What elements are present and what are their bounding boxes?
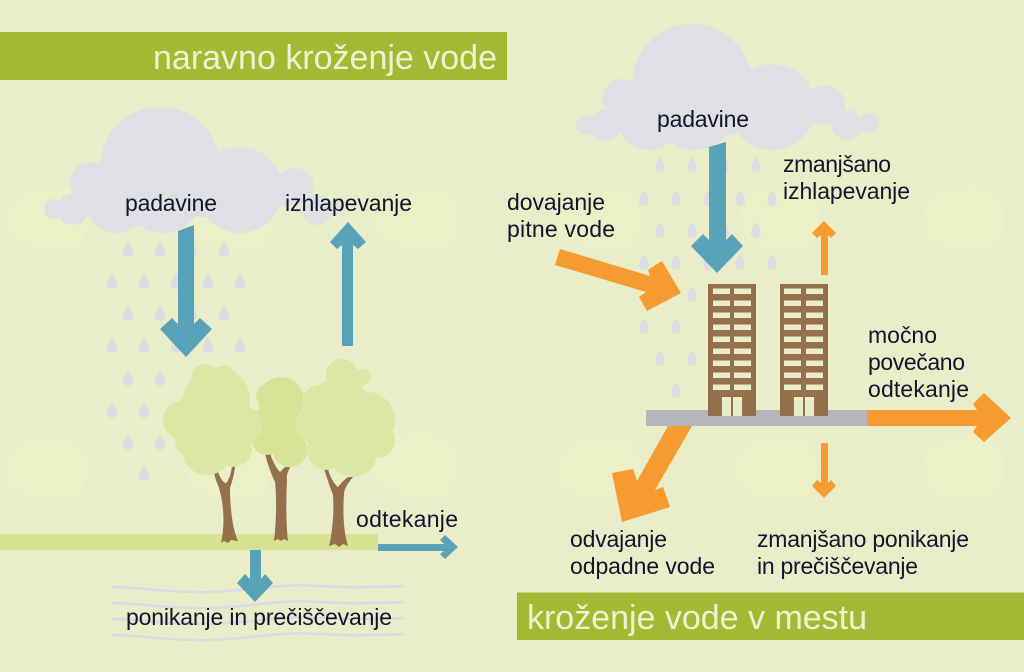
label: zmanjšano izhlapevanje [783,151,910,204]
heading text: natural water cycle: naravno kroženje vode [153,39,497,77]
building 2 [780,284,828,416]
cloud: natural cycle [44,107,343,233]
label: dovajanje pitne vode: pitne vode [507,216,615,242]
label: močno povečano odtekanje: povečano [868,349,965,375]
label: izhlapevanje: izhlapevanje [285,190,412,216]
ground strip [0,534,378,550]
heading text: urban water cycle: kroženje vode v mestu [527,599,867,637]
heading bar: urban water cycle [517,592,1024,640]
label: močno povečano odtekanje: odtekanje [868,376,969,402]
building 1 [708,284,756,416]
raindrops: urban cycle [639,157,777,398]
arrow: infiltration [237,550,273,602]
label: dovajanje pitne vode: dovajanje [507,189,605,215]
label: zmanjšano izhlapevanje: zmanjšano [783,151,891,177]
arrow: reduced infiltration [812,443,836,498]
arrow: drinking water supply [555,249,681,311]
label: odvajanje odpadne vode: odpadne vode [570,553,715,579]
arrow: wastewater discharge [612,426,692,522]
arrow: strongly increased runoff [867,393,1011,442]
label: zmanjšano ponikanje in prečiščevanje: in prečiščevanje [757,553,918,579]
label: močno povečano odtekanje [868,322,969,402]
label: zmanjšano izhlapevanje: izhlapevanje [783,178,910,204]
label: padavine: padavine [657,106,749,132]
label: dovajanje pitne vode [507,189,615,242]
label: zmanjšano ponikanje in prečiščevanje [757,526,969,579]
tree 1 [163,364,262,543]
tree 3 [295,359,395,547]
label: padavine: padavine [125,190,217,216]
panel: urban water cycle [507,24,1011,579]
arrow: evaporation [330,222,366,346]
road [646,410,867,426]
groundwater waves [112,585,404,640]
panel: natural water cycle [0,107,458,640]
arrow: precipitation [691,142,743,273]
arrow: precipitation [160,225,212,357]
label: odtekanje: odtekanje [356,506,458,532]
arrow: runoff [378,535,458,559]
raindrops: natural cycle [107,241,245,481]
label: ponikanje in prečiščevanje: ponikanje in prečiščevanje [126,604,392,630]
heading bar: natural water cycle [0,32,507,80]
label: zmanjšano ponikanje in prečiščevanje: zmanjšano ponikanje [757,526,969,552]
label: odvajanje odpadne vode: odvajanje [570,526,667,552]
label: odvajanje odpadne vode [570,526,715,579]
arrow: reduced evaporation [812,221,836,275]
cloud: urban cycle [576,24,879,150]
label: močno povečano odtekanje: močno [868,322,937,348]
tree 2 [252,377,308,541]
